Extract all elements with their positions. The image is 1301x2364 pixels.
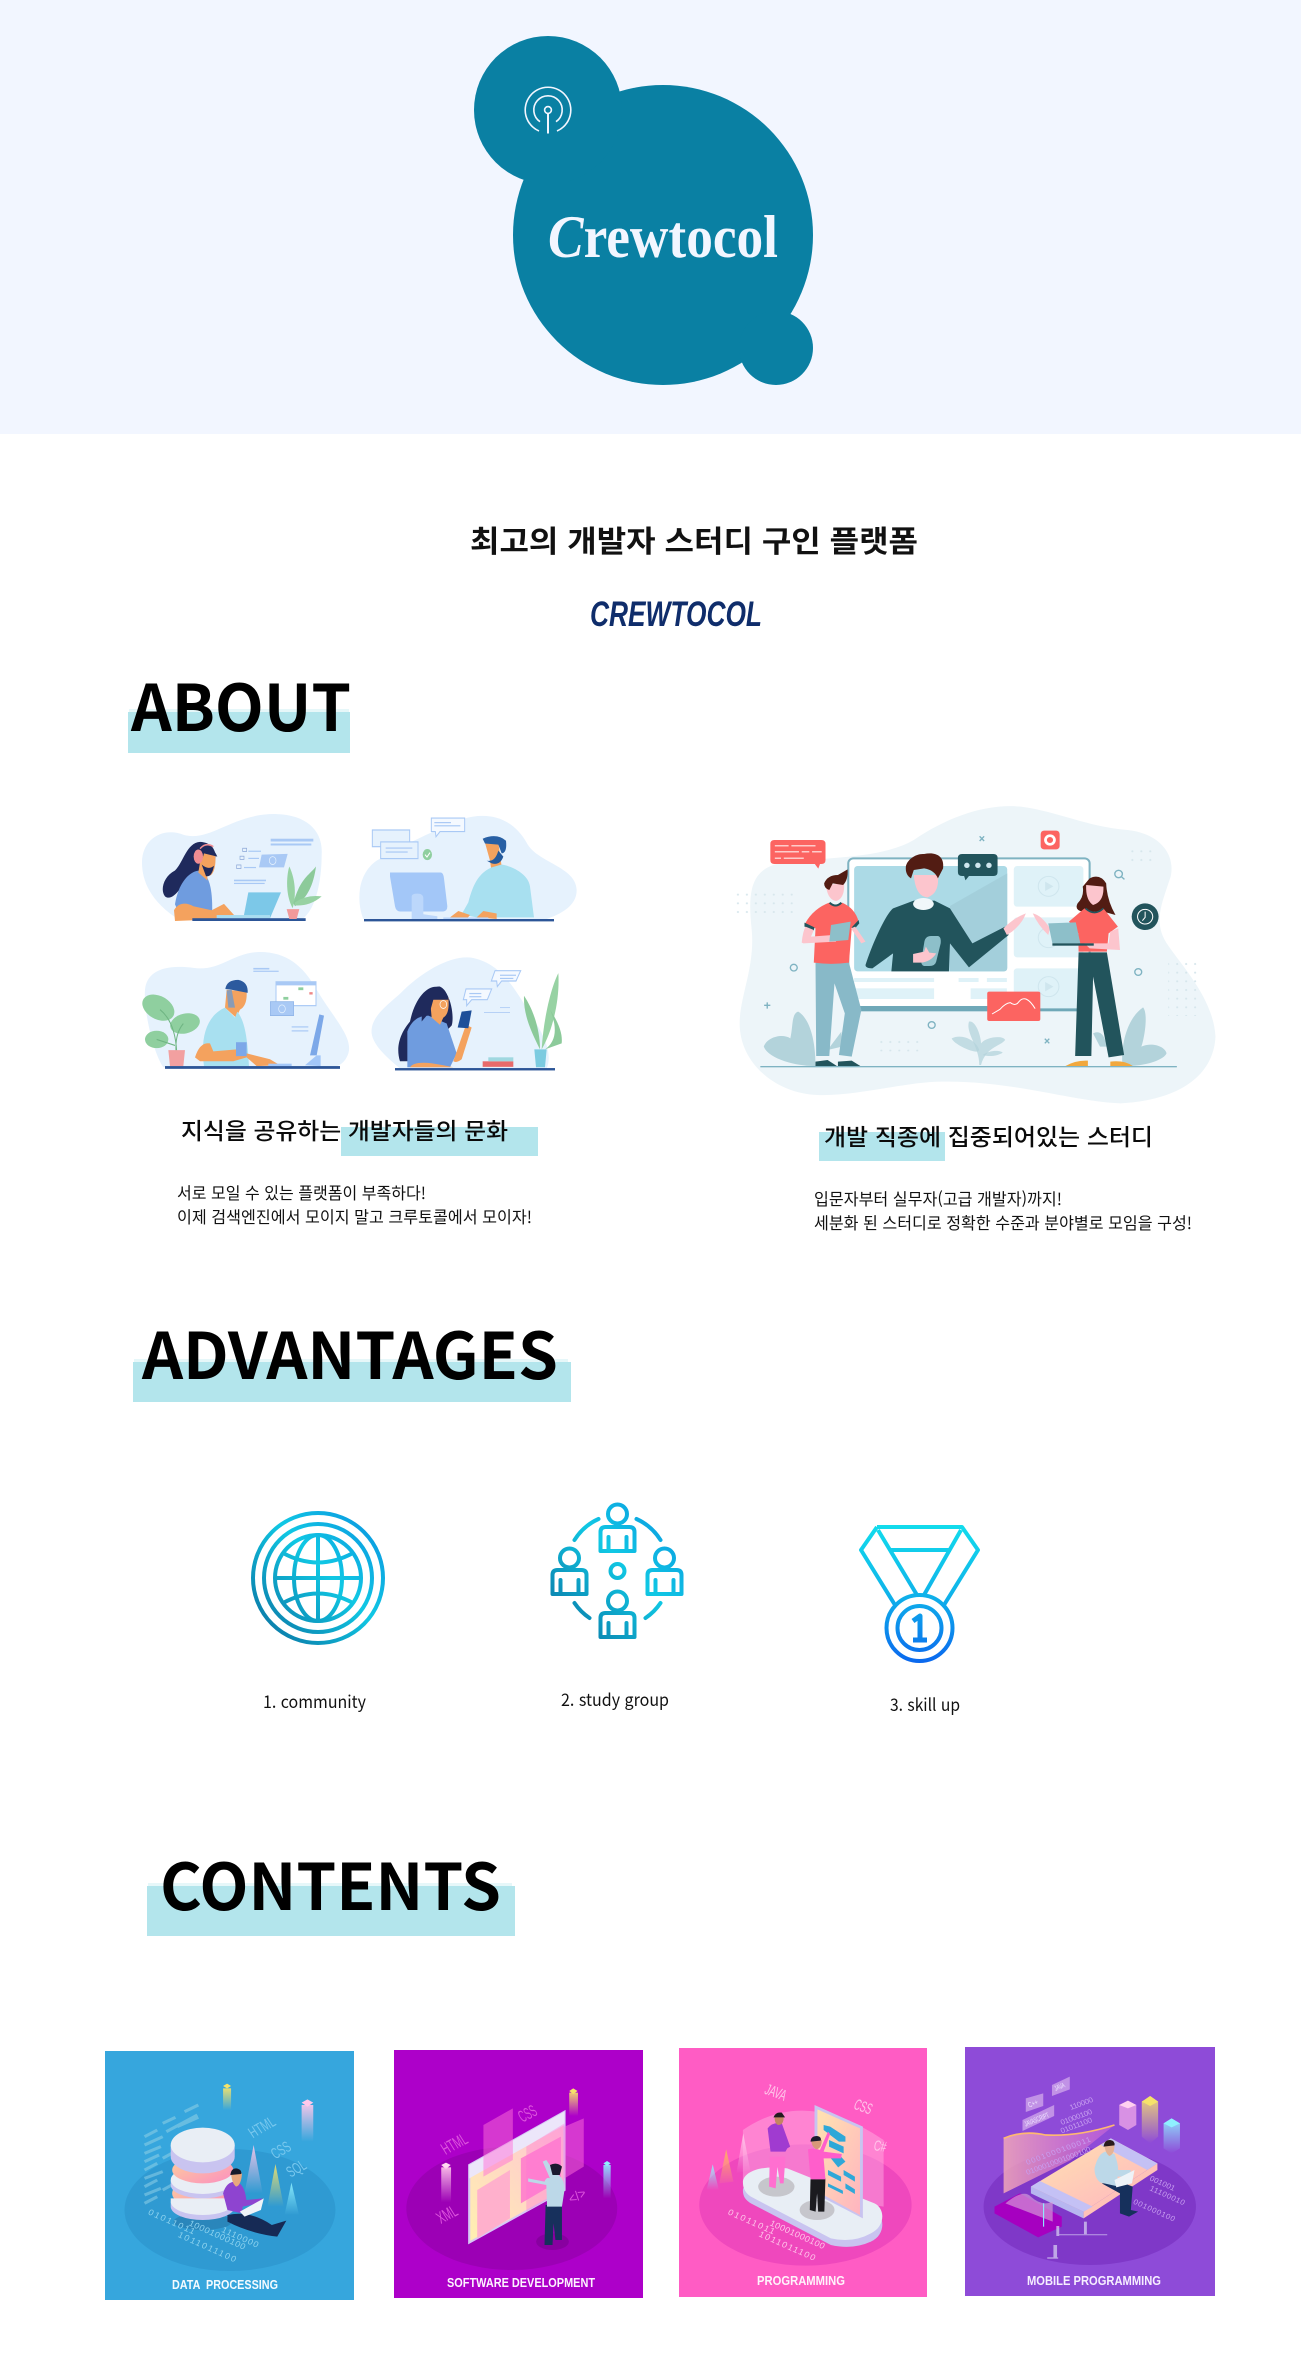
card art: floating screens: </>: [565, 2185, 589, 2206]
card: programming: PROGRAMMING: [757, 2273, 845, 2288]
person right with laptop: [1033, 877, 1133, 1066]
background plants: [764, 1007, 1167, 1066]
icon: radio signal: [525, 87, 571, 134]
card art: flat phone and charts: 01000100: [1059, 2107, 1094, 2127]
card art: flowchart phone: [699, 2081, 912, 2266]
icon: clock: [1132, 903, 1159, 930]
card art: flowchart phone: CSS: [851, 2096, 875, 2118]
presenter on screen: [866, 853, 1026, 971]
card art: database and developer: 1110000: [220, 2225, 261, 2250]
card art: floating screens: [406, 2088, 617, 2270]
dot patterns: [737, 849, 1200, 1051]
scene: man at desktop: [359, 816, 577, 921]
label: skill up: 3. skill up: [890, 1691, 960, 1716]
tagline: 최고의 개발자 스터디 구인 플랫폼: [470, 517, 918, 561]
section heading: contents: CONTENTS: [160, 1837, 501, 1929]
scene: woman with phone: [372, 957, 562, 1070]
card art: floating screens: CSS: [514, 2101, 541, 2126]
subheading: job focused study: 개발 직종에 집중되어있는 스터디: [824, 1118, 1153, 1152]
header band: [0, 0, 1301, 434]
card: mobile programming: MOBILE PROGRAMMING: [1027, 2273, 1161, 2288]
card: data processing: DATA PROCESSING: [172, 2277, 278, 2292]
subheading: developer culture: 지식을 공유하는 개발자들의 문화: [181, 1112, 508, 1146]
body text: study levels: [814, 1186, 1192, 1234]
section heading: advantages: ADVANTAGES: [141, 1306, 558, 1398]
card art: flat phone and charts: 001001: [1148, 2174, 1177, 2193]
card art: flowchart phone: 10001000100: [768, 2218, 827, 2251]
illustration: online study video: [737, 806, 1215, 1103]
speech bubble red: [770, 840, 826, 869]
card: programming: [679, 2048, 927, 2297]
card art: database and developer: CSS: [268, 2138, 295, 2163]
label: community: 1. community: [263, 1688, 366, 1713]
card art: database and developer: HTML: [245, 2113, 279, 2142]
card art: flat phone and charts: 0001000100011: [1025, 2135, 1092, 2167]
card art: database and developer: 01011011: [147, 2207, 197, 2236]
body text: platform shortage: 서로 모일 수 있는 플랫폼이 부족하다!: [177, 1180, 426, 1204]
scene: woman with laptop: [142, 814, 322, 921]
card art: flat phone and charts: JAVASCRIPT: [1023, 2111, 1051, 2128]
card: data processing: [105, 2051, 354, 2300]
card art: flat phone and charts: [984, 2077, 1196, 2265]
card: mobile programming: [965, 2047, 1215, 2296]
logo wordmark: Crewtocol: [548, 204, 778, 270]
card art: database and developer: 10001000100: [187, 2218, 248, 2252]
small decorative marks: [764, 836, 1142, 1043]
scene: man with monitor: [139, 952, 349, 1069]
card art: flowchart phone: JAVA: [762, 2081, 789, 2104]
body text: platform shortage: 이제 검색엔진에서 모이지 말고 크루토콜에서 모이자!: [177, 1204, 532, 1228]
brand name: CREWTOCOL: [590, 595, 762, 634]
person left with tablet: [802, 869, 866, 1066]
card art: flowchart phone: 1011011100: [757, 2229, 818, 2263]
video screen: [848, 858, 1090, 1011]
card: software development: [394, 2050, 643, 2298]
subheading: developer culture: [181, 1112, 538, 1156]
background blob: [740, 806, 1215, 1103]
card art: flat phone and charts: 001000100: [1132, 2197, 1177, 2223]
card art: flowchart phone: 01011011: [726, 2207, 777, 2236]
card art: flat phone and charts: JAVA: [1053, 2081, 1067, 2093]
card art: database and developer: SQL: [283, 2157, 310, 2181]
card art: flat phone and charts: 0100010001000100: [1025, 2145, 1092, 2177]
icon: globe: [253, 1513, 383, 1643]
card art: flat phone and charts: 110000: [1068, 2095, 1095, 2112]
card art: floating screens: XML: [433, 2201, 461, 2227]
ground line: [760, 1066, 1177, 1067]
card art: flat phone and charts: C++: [1026, 2098, 1040, 2109]
card art: flat phone and charts: 11100010: [1148, 2184, 1187, 2207]
speech bubble dark: [958, 854, 998, 880]
card art: database and developer: [125, 2084, 335, 2271]
card art: flat phone and charts: 01011100: [1059, 2116, 1094, 2135]
icon: gear: [1041, 831, 1060, 849]
section heading: about: ABOUT: [130, 658, 351, 750]
logo: [474, 36, 813, 385]
body text: study levels: 세분화 된 스터디로 정확한 수준과 분야별로 모임을 구성!: [814, 1210, 1192, 1234]
icon: medal: [861, 1527, 978, 1661]
logo blob: [474, 36, 813, 385]
chart card: [987, 992, 1040, 1021]
label: study group: 2. study group: [561, 1686, 669, 1711]
card: software development: SOFTWARE DEVELOPMENT: [447, 2275, 595, 2290]
body text: study levels: 입문자부터 실무자(고급 개발자)까지!: [814, 1186, 1062, 1210]
card art: floating screens: HTML: [437, 2129, 471, 2158]
body text: platform shortage: [177, 1180, 532, 1228]
card art: database and developer: 1011011100: [176, 2230, 238, 2264]
card art: flowchart phone: C#: [872, 2138, 888, 2156]
illustration: four developers: [139, 814, 577, 1070]
icon: study group: [552, 1504, 682, 1637]
